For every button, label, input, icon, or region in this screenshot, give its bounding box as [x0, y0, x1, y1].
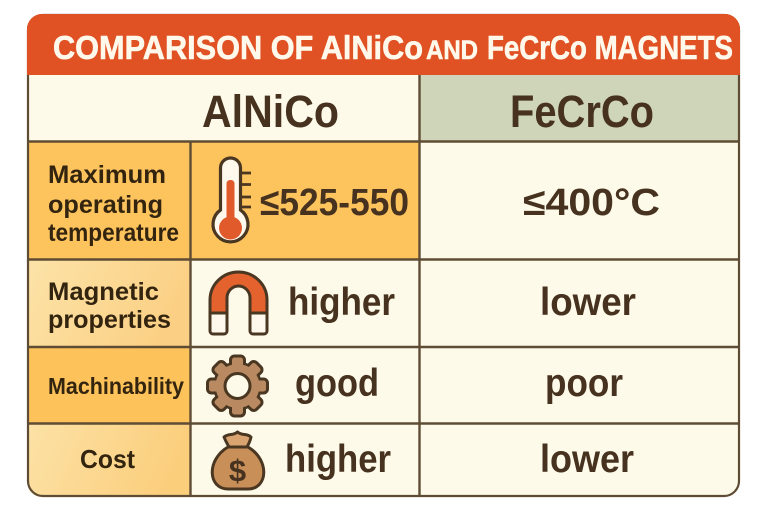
row label: maximum operating temperature: Maximum [48, 161, 166, 189]
value: FeCrCo temperature: ≤400°C [523, 182, 660, 224]
title text: AND [426, 35, 478, 65]
row label: magnetic properties [48, 278, 171, 334]
row label: maximum operating temperature: operating [48, 191, 163, 219]
row label: maximum operating temperature [48, 161, 179, 247]
value: AlNiCo temperature: ≤525-550 [260, 182, 409, 224]
value: FeCrCo magnetic properties: lower [540, 281, 636, 324]
row label: maximum operating temperature: temperature [48, 219, 179, 247]
column heading: AlNiCo: AlNiCo [202, 86, 339, 137]
icon: money bag: $ [229, 453, 246, 488]
icon: horseshoe magnet [210, 272, 267, 334]
icon: gear [208, 356, 268, 416]
grid lines [28, 75, 739, 497]
icon: thermometer [213, 158, 251, 242]
row label: magnetic properties: Magnetic [48, 278, 159, 306]
cell backgrounds [28, 75, 739, 497]
column heading: FeCrCo: FeCrCo [510, 86, 654, 137]
title text: COMPARISON OF AlNiCo [53, 29, 423, 66]
value: AlNiCo machinability: good [295, 362, 379, 405]
icon: money bag [212, 432, 264, 489]
row label: cost: Cost [80, 444, 135, 474]
title text [53, 29, 733, 66]
value: AlNiCo magnetic properties: higher [288, 281, 395, 324]
title banner [27, 14, 740, 75]
row label: magnetic properties: properties [48, 306, 171, 334]
value: AlNiCo cost: higher [285, 438, 391, 481]
value: FeCrCo cost: lower [540, 438, 634, 481]
value: FeCrCo machinability: poor [545, 362, 623, 405]
row label: machinability: Machinability [48, 373, 184, 399]
